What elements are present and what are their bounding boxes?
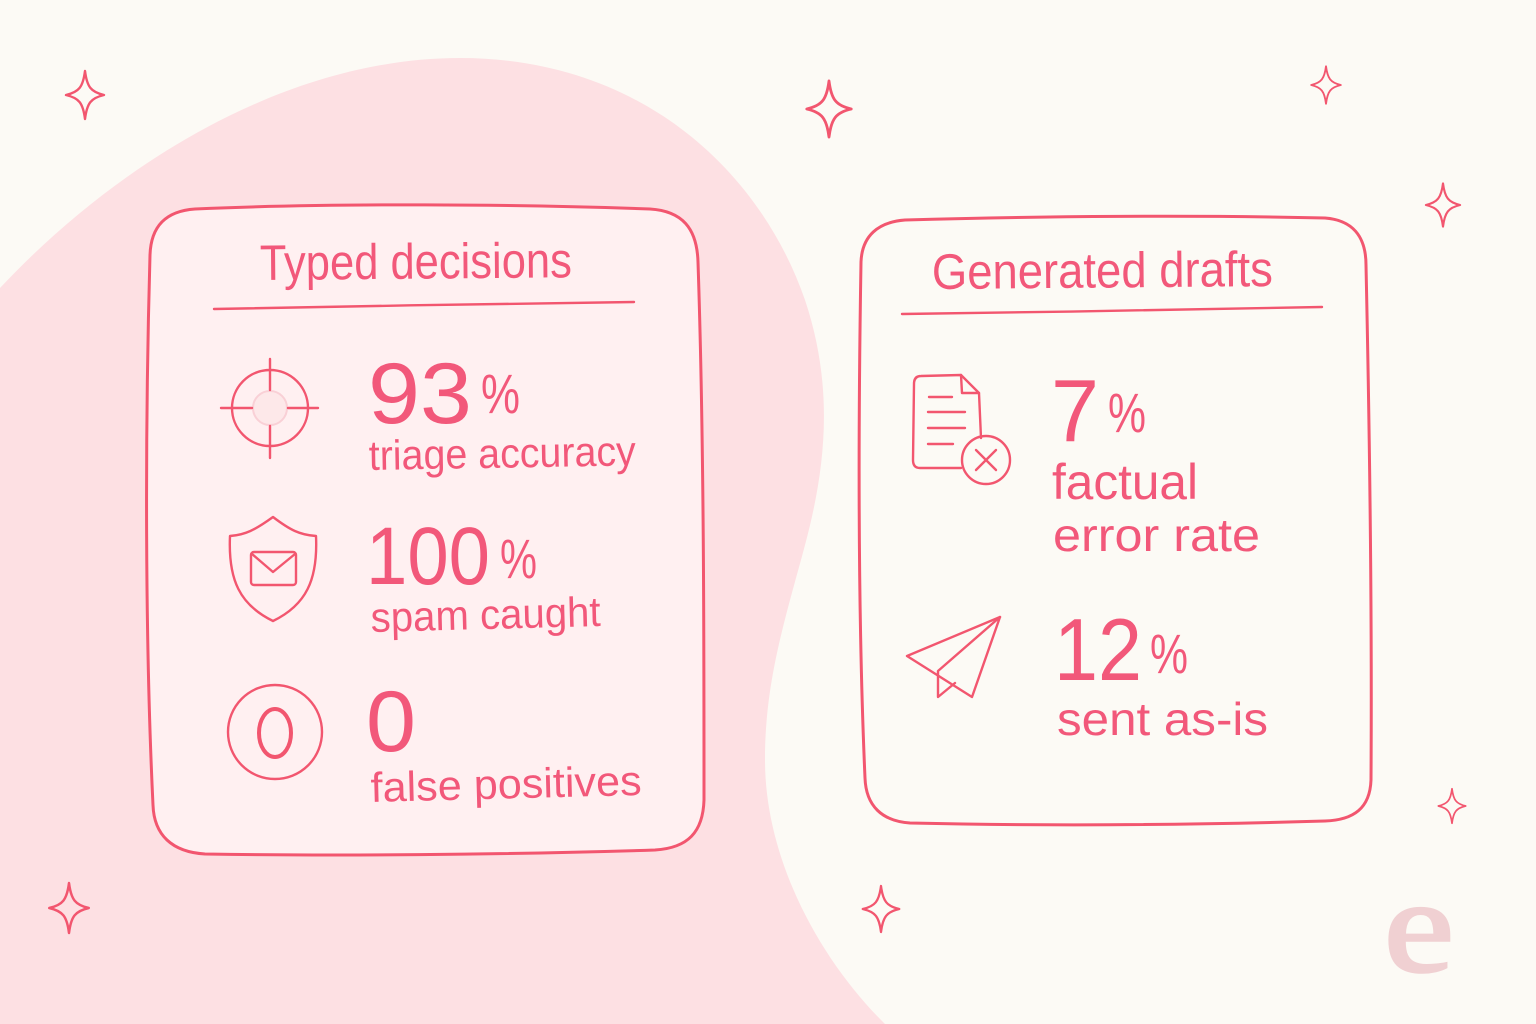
stat: 12%: 12 [1054,600,1142,699]
label: factual error rate [1052,454,1260,561]
heading: Typed decisions [260,232,572,291]
divider [214,302,634,309]
stat: 93% [368,346,520,442]
divider [902,307,1322,314]
logo mark: e [1384,852,1454,1000]
stat: 0: 0 [366,674,416,770]
icon: paper plane [907,617,1000,697]
label: factual error rate: factual [1052,454,1198,510]
panel: generated drafts [859,216,1371,825]
stat: 100%: 100 [366,511,490,602]
label: factual error rate: error rate [1053,509,1260,561]
panel outline [859,216,1371,825]
stat: 7%: % [1108,381,1146,444]
label: sent as-is: sent as-is [1057,693,1268,745]
stat: 12%: % [1150,622,1188,685]
sparkles [49,66,1466,933]
panel outline [147,205,704,855]
stat: 93%: % [481,362,520,425]
stat: 7%: 7 [1051,361,1099,460]
stat: 93%: 93 [368,346,472,442]
label: triage accuracy: triage accuracy [368,427,636,479]
background blob [0,58,885,1024]
icon: zero circle [228,685,322,779]
panel: typed decisions [147,205,704,855]
label: spam caught: spam caught [370,588,601,641]
label: false positives: false positives [370,757,642,811]
stat: 7% [1051,361,1146,460]
icon: shield with envelope [230,517,316,621]
stat: 100%: % [500,527,537,590]
heading: Generated drafts [932,241,1273,300]
icon: document with x [913,375,1010,484]
icon: target [221,359,318,458]
